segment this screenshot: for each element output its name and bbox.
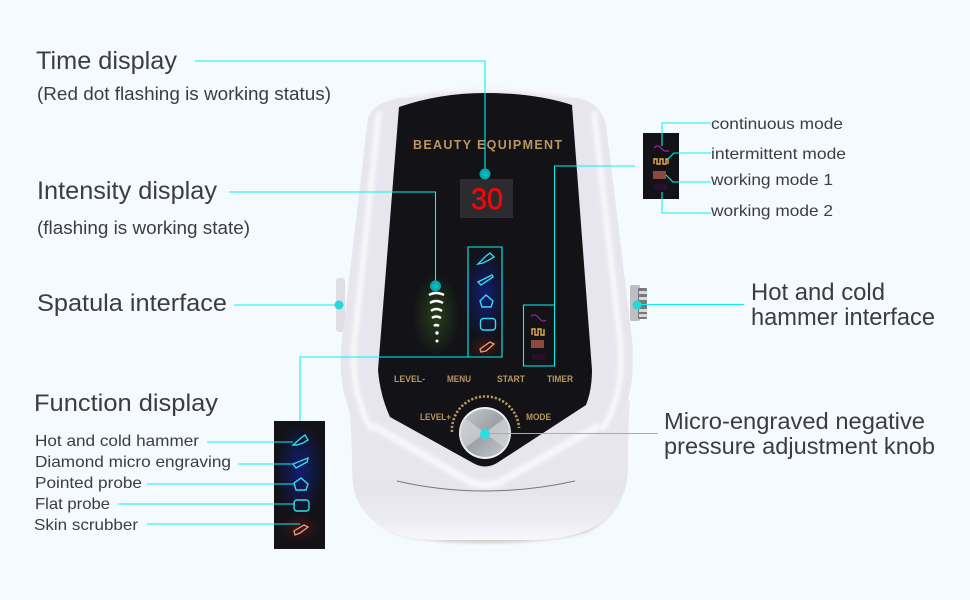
panel: function icons — [274, 421, 325, 549]
label: time display: Time display — [36, 47, 177, 75]
device: beauty equipment machine — [336, 87, 647, 543]
function list labels — [34, 433, 231, 534]
button labels: START — [497, 374, 525, 384]
button labels: LEVEL+ — [420, 412, 451, 422]
time display screen: 30 — [471, 183, 503, 216]
leader: hammer interface — [632, 300, 744, 310]
intensity indicator — [412, 273, 460, 357]
mode labels: working mode 2 — [710, 203, 833, 220]
black control panel — [378, 93, 592, 466]
leader: intensity display — [229, 192, 441, 292]
icon: diamond engraving — [293, 458, 308, 468]
function list labels: Pointed probe — [35, 475, 142, 492]
leader: knob — [480, 429, 658, 439]
icon: continuous wave — [654, 146, 669, 151]
panel: mode icons — [643, 133, 679, 199]
button labels: MODE — [526, 412, 551, 422]
brand text: BEAUTY EQUIPMENT — [413, 138, 562, 152]
function display callout box and leader — [300, 247, 502, 421]
icon: working mode 2 — [654, 184, 667, 190]
dial scale — [452, 396, 519, 432]
spatula interface stub — [336, 278, 345, 332]
base seam — [397, 481, 575, 491]
mode leaders — [662, 123, 711, 213]
label: intensity display: Intensity display — [37, 177, 217, 205]
label: knob: Micro-engraved negative — [664, 408, 925, 434]
label: knob: pressure adjustment knob — [664, 433, 935, 459]
device body shell — [341, 87, 633, 491]
function list labels: Hot and cold hammer — [35, 433, 200, 450]
label: knob — [664, 408, 935, 459]
time display screen — [460, 179, 513, 218]
hammer interface connector — [630, 285, 647, 321]
label: function display: Function display — [34, 390, 218, 417]
button labels: TIMER — [547, 374, 573, 384]
function list labels: Diamond micro engraving — [35, 454, 231, 471]
label: hot and cold hammer interface: hammer interface — [751, 304, 935, 331]
mode icons on panel — [531, 315, 546, 360]
leader: time display — [195, 61, 490, 180]
function icons on panel — [463, 247, 507, 359]
mode labels: intermittent mode — [711, 146, 846, 163]
leader: spatula interface — [234, 300, 344, 310]
icon: flat probe — [294, 500, 309, 511]
icon: skin scrubber — [294, 525, 308, 535]
function list labels: Skin scrubber — [34, 517, 139, 534]
function list labels: Flat probe — [35, 496, 110, 513]
function list leaders — [118, 442, 300, 524]
adjustment knob — [459, 407, 511, 459]
icon: working mode 1 — [653, 171, 666, 179]
mode labels: working mode 1 — [710, 172, 833, 189]
button labels: MENU — [447, 374, 471, 384]
button labels: LEVEL- — [394, 374, 425, 384]
label: red dot note: (Red dot flashing is working status) — [37, 84, 331, 104]
icon: intermittent wave — [654, 159, 668, 164]
icon: pointed probe — [294, 478, 308, 490]
label: hot and cold hammer interface: Hot and cold — [751, 279, 885, 306]
label: flashing note: (flashing is working state) — [37, 218, 250, 238]
base shadow — [360, 500, 620, 543]
button labels — [394, 374, 573, 422]
icon: hammer — [293, 435, 308, 445]
mode callout box and leader — [524, 166, 635, 366]
mode labels: continuous mode — [711, 116, 843, 133]
mode labels — [710, 116, 846, 220]
label: spatula interface: Spatula interface — [37, 290, 227, 317]
label: hot and cold hammer interface — [751, 279, 935, 331]
device base — [348, 400, 630, 540]
